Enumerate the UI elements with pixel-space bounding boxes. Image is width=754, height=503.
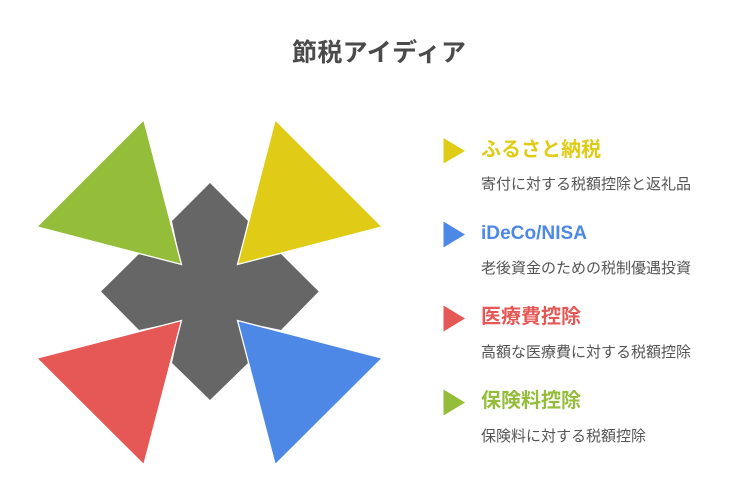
legend item: medical [444,305,691,361]
marker: blue arrow [444,222,465,248]
title: 節税アイディア [292,38,466,67]
description: furusato: 寄付に対する税額控除と返礼品 [481,176,691,193]
marker: yellow arrow [444,138,465,164]
heading: medical: 医療費控除 [481,305,581,328]
heading: furusato: ふるさと納税 [481,138,601,161]
marker: green arrow [444,390,465,416]
triangle: red [38,320,182,464]
description: iDeCo/NISA: 老後資金のための税制優遇投資 [481,260,691,277]
heading: iDeCo/NISA: iDeCo/NISA [481,223,587,244]
triangle: blue [238,320,382,464]
legend item: insurance [444,389,646,445]
triangle: yellow [238,120,382,264]
description: medical: 高額な医療費に対する税額控除 [481,344,691,361]
diagram: central cross with four triangles [38,120,382,464]
heading: insurance: 保険料控除 [481,389,581,412]
description: insurance: 保険料に対する税額控除 [481,428,646,445]
central gray cross [101,183,319,400]
legend item: furusato [444,138,691,193]
legend item: iDeCo/NISA [444,222,691,277]
triangle: green [38,120,182,264]
marker: red arrow [444,306,465,332]
